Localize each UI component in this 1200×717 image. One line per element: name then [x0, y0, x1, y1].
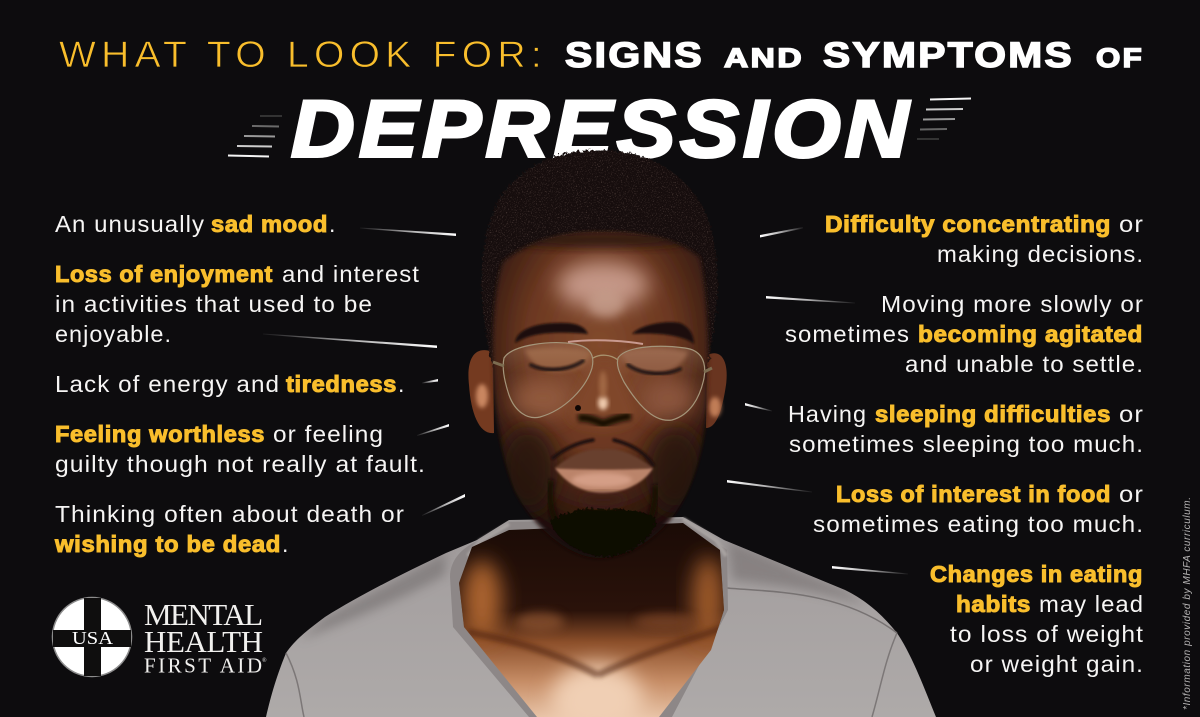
logo wordmark: MENTAL: [144, 597, 263, 632]
symptom: agitation: and unable to settle.: [905, 351, 1144, 377]
ears: [468, 350, 727, 433]
logo badge: USA: [72, 628, 113, 648]
moustache: [553, 440, 653, 465]
logo wordmark: ®: [262, 657, 267, 664]
face: [493, 232, 708, 558]
logo wordmark: [144, 597, 267, 678]
symptom: feeling worthless: Feeling worthless: [55, 421, 265, 447]
title: what to look for: OF: [1096, 43, 1144, 73]
symptom: sad mood: An unusually: [55, 211, 205, 237]
symptom: sad mood: .: [329, 211, 336, 237]
title: what to look for: [59, 34, 1144, 75]
eyebrows: [515, 322, 694, 344]
symptom: feeling worthless: guilty though not really at fault.: [55, 451, 426, 477]
symptom: agitation: Moving more slowly or: [881, 291, 1144, 317]
symptom: feeling worthless: or feeling: [273, 421, 384, 447]
symptom: tiredness: .: [398, 371, 405, 397]
goatee: [550, 480, 656, 557]
symptom: difficulty concentrating: [825, 211, 1144, 267]
lips: [555, 449, 653, 493]
symptom: thoughts of death: [54, 501, 405, 557]
shirt: [266, 517, 936, 717]
symptom: loss of interest in food: or: [1119, 481, 1144, 507]
symptom: difficulty concentrating: Difficulty concentrating: [825, 211, 1111, 237]
pointer lines: left column: [263, 228, 465, 516]
symptom: eating habits: may lead: [1039, 591, 1144, 617]
symptom: sleeping difficulties: sometimes sleeping too much.: [789, 431, 1144, 457]
symptom: thoughts of death: wishing to be dead: [54, 531, 281, 557]
symptom: thoughts of death: Thinking often about death or: [55, 501, 405, 527]
symptom: loss of enjoyment: enjoyable.: [55, 321, 172, 347]
speed lines right of wordmark: [917, 98, 971, 139]
symptom: feeling worthless: [55, 421, 426, 477]
logo: Mental Health First Aid USA: [52, 597, 267, 678]
photo: man with closed eyes: [266, 150, 936, 717]
title: what to look for: SYMPTOMS: [823, 36, 1074, 75]
neck and chest: [459, 523, 724, 717]
symptom: loss of enjoyment: in activities that used to be: [55, 291, 373, 317]
logo badge: [52, 598, 132, 676]
symptom: eating habits: Changes in eating: [930, 561, 1143, 587]
symptom: agitation: becoming agitated: [918, 321, 1143, 347]
symptom: thoughts of death: .: [282, 531, 289, 557]
symptom: tiredness: [55, 371, 405, 397]
logo wordmark: FIRST AID: [144, 654, 262, 678]
title: what to look for: WHAT TO LOOK FOR:: [59, 34, 547, 75]
hair: [481, 150, 718, 368]
symptom: sleeping difficulties: or: [1119, 401, 1144, 427]
title: depression wordmark: DEPRESSION: [291, 84, 913, 174]
symptom: loss of enjoyment: Loss of enjoyment: [55, 261, 273, 287]
symptom: loss of enjoyment: [55, 261, 420, 347]
closed eyes: [525, 348, 688, 374]
symptom: agitation: sometimes: [785, 321, 910, 347]
symptom: eating habits: or weight gain.: [970, 651, 1144, 677]
symptom: eating habits: [930, 561, 1144, 677]
pointer lines: right column: [727, 227, 908, 574]
symptom: eating habits: to loss of weight: [950, 621, 1144, 647]
symptom: sleeping difficulties: Having: [788, 401, 867, 427]
glasses: [493, 340, 712, 420]
source note: *Information provided by MHFA curriculum.: [1182, 497, 1193, 710]
symptom: loss of interest in food: [813, 481, 1144, 537]
symptom: loss of interest in food: Loss of interest in food: [836, 481, 1111, 507]
symptom: difficulty concentrating: or: [1119, 211, 1144, 237]
symptom: sleeping difficulties: sleeping difficulties: [875, 401, 1111, 427]
symptom: loss of interest in food: sometimes eating too much.: [813, 511, 1144, 537]
symptom: sleeping difficulties: [788, 401, 1144, 457]
logo wordmark: HEALTH: [144, 624, 263, 659]
symptom: loss of enjoyment: and interest: [282, 261, 420, 287]
nose: [570, 360, 637, 428]
speed lines left of wordmark: [228, 116, 282, 156]
symptom: agitation: [785, 291, 1144, 377]
title: what to look for: SIGNS: [565, 36, 704, 75]
symptom: sad mood: sad mood: [211, 211, 328, 237]
symptom: tiredness: Lack of energy and: [55, 371, 280, 397]
symptom: eating habits: habits: [956, 591, 1031, 617]
symptom: tiredness: tiredness: [286, 371, 397, 397]
title: what to look for: AND: [724, 43, 804, 73]
symptom: sad mood: [55, 211, 336, 237]
symptom: difficulty concentrating: making decisions.: [937, 241, 1144, 267]
